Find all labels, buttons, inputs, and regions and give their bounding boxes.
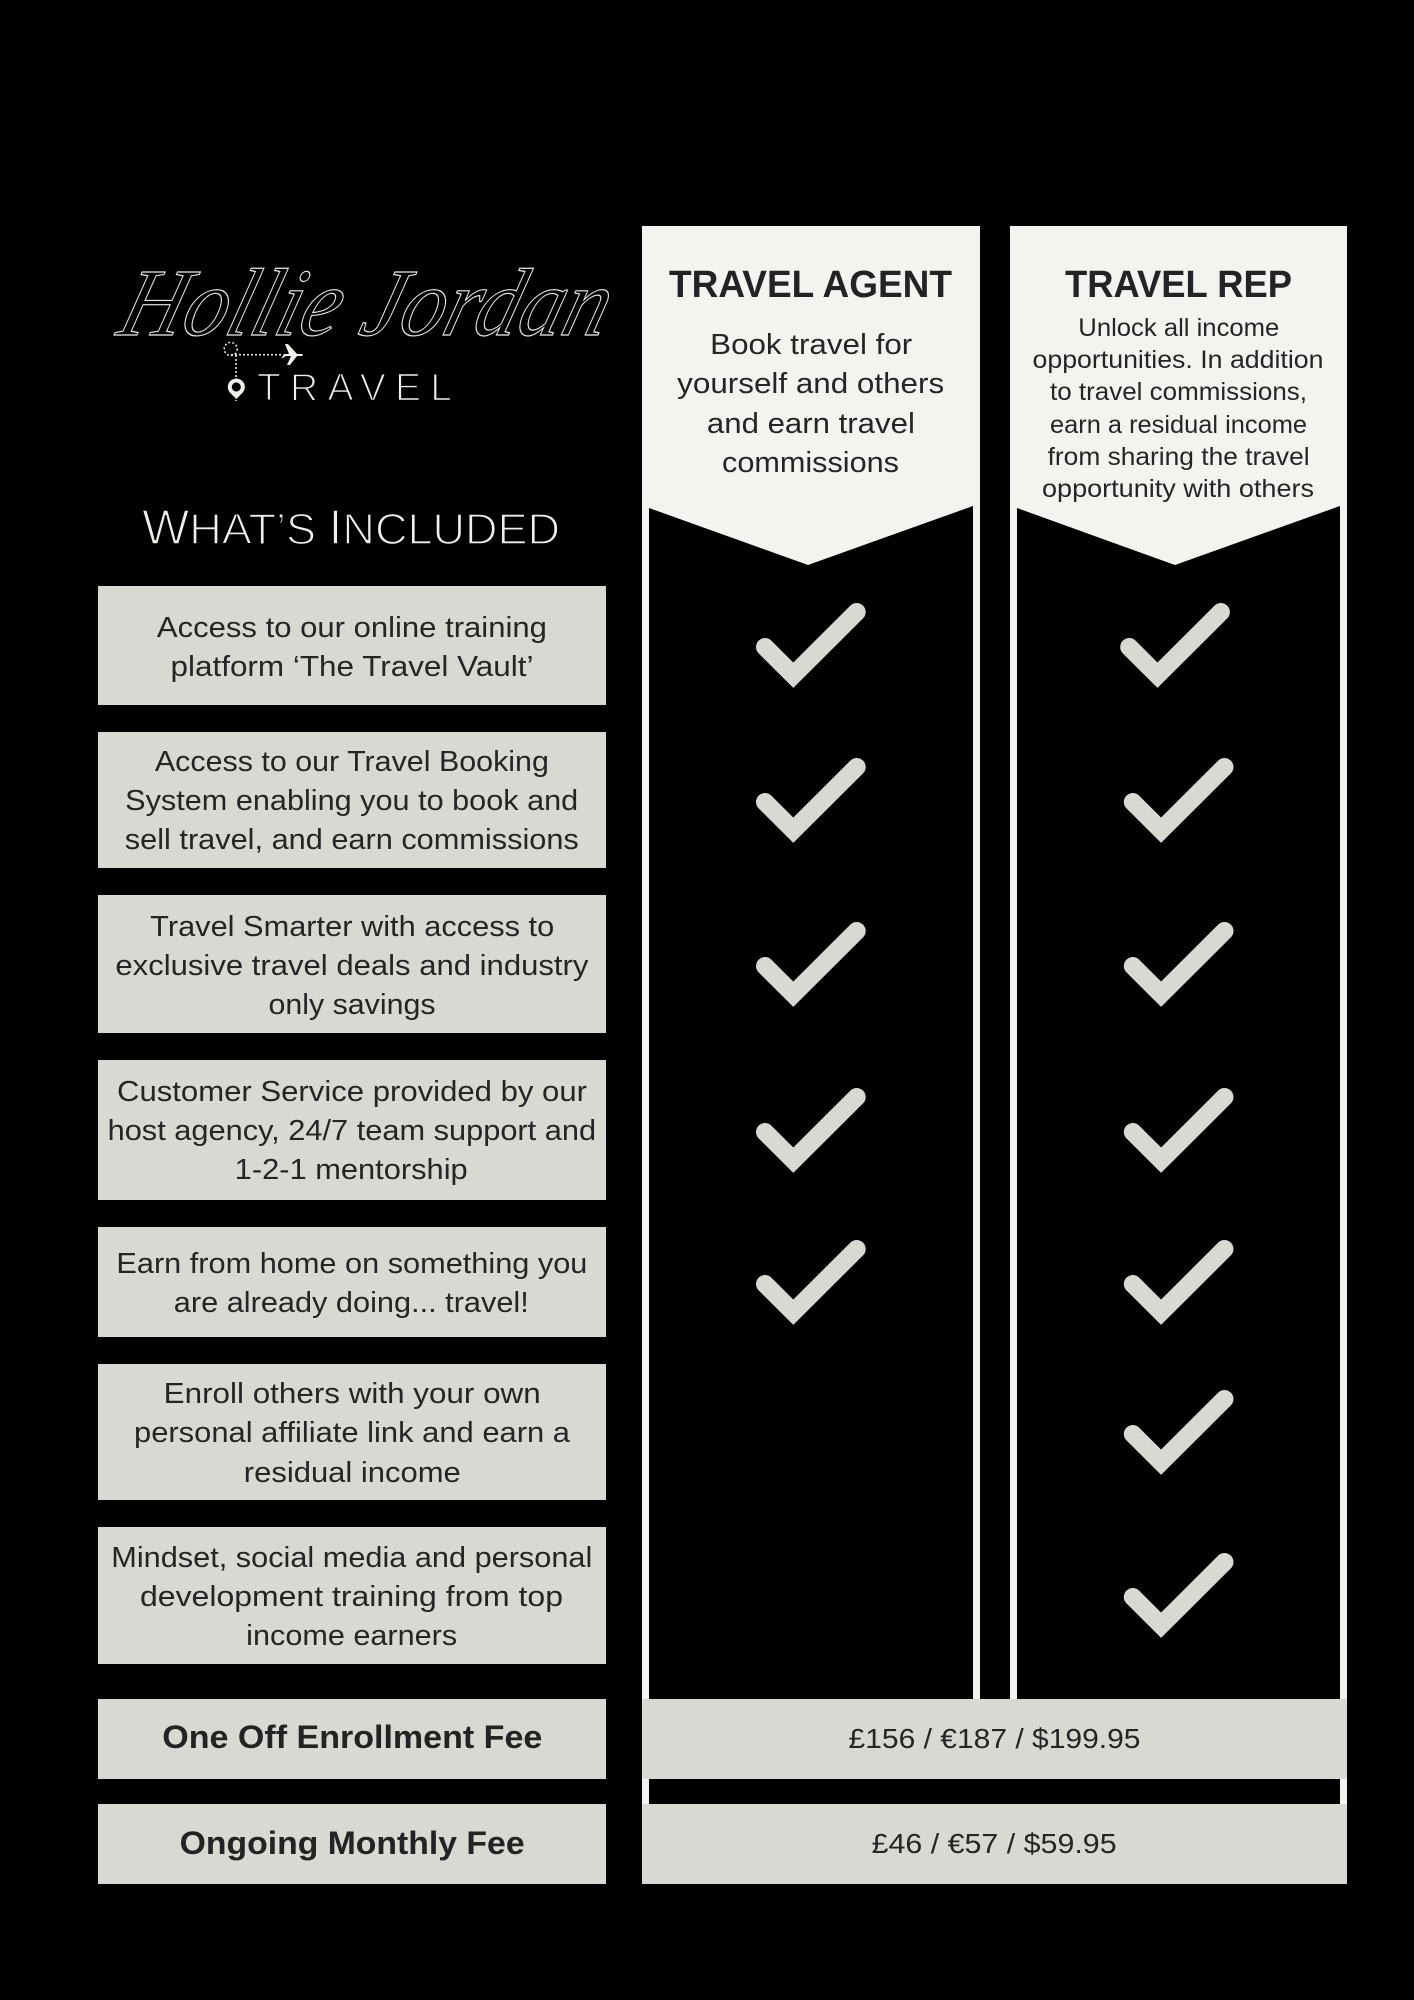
- feature row 2: [98, 732, 606, 868]
- feature row 4: 1-2-1 mentorship: [235, 1154, 468, 1186]
- feature row 3: only savings: [268, 989, 436, 1021]
- description: Travel Agent: Book travel for: [710, 329, 913, 361]
- feature row 1: platform ‘The Travel Vault’: [170, 651, 534, 683]
- feature row 3: Travel Smarter with access to: [150, 911, 554, 943]
- black gap between fee rows: [649, 1779, 1340, 1804]
- label: Ongoing Monthly Fee: Ongoing Monthly Fee: [180, 1825, 525, 1861]
- feature row 6: Enroll others with your own: [164, 1378, 541, 1410]
- feature row 7: development training from top: [140, 1581, 563, 1613]
- description: Travel Rep: earn a residual income: [1050, 411, 1307, 439]
- description: Travel Agent: and earn travel: [707, 408, 915, 440]
- panel: Travel Agent column: [642, 226, 980, 1804]
- label: One Off Enrollment Fee: [98, 1699, 606, 1779]
- feature row 5: Earn from home on something you: [116, 1248, 587, 1280]
- feature row 2: System enabling you to book and: [125, 785, 578, 817]
- description: Travel Rep: opportunities. In addition: [1032, 346, 1324, 374]
- price row: monthly fee: [642, 1804, 1347, 1884]
- label: Ongoing Monthly Fee: [98, 1804, 606, 1884]
- price row: enrollment fee: £156 / €187 / $199.95: [848, 1723, 1140, 1754]
- logo signature: Hollie Jordan: [108, 251, 626, 357]
- feature row 6: residual income: [244, 1457, 461, 1489]
- feature row 7: Mindset, social media and personal: [111, 1542, 592, 1574]
- feature row 3: exclusive travel deals and industry: [115, 950, 589, 982]
- icon: Travel Rep checkmarks: [1129, 612, 1224, 1625]
- feature row 5: [98, 1227, 606, 1337]
- description: Travel Agent: commissions: [722, 447, 899, 479]
- panel: Travel Rep column: [1010, 226, 1347, 1804]
- price row: monthly fee: £46 / €57 / $59.95: [872, 1828, 1117, 1859]
- logo: Hollie Jordan Travel: [108, 251, 626, 410]
- price row: enrollment fee: [642, 1699, 1347, 1779]
- description: Travel Agent: yourself and others: [677, 368, 944, 400]
- label: One Off Enrollment Fee: One Off Enrollment Fee: [162, 1719, 542, 1755]
- icon: Travel Agent checkmarks: [765, 612, 857, 1312]
- feature row 4: [98, 1060, 606, 1200]
- description: Travel Rep: opportunity with others: [1042, 475, 1314, 503]
- feature row 3: [98, 895, 606, 1033]
- icon: flight path with plane and pin: [224, 342, 303, 401]
- feature row 2: Access to our Travel Booking: [155, 746, 549, 778]
- feature row 2: sell travel, and earn commissions: [125, 824, 579, 856]
- feature row 6: personal affiliate link and earn a: [134, 1417, 571, 1449]
- logo word TRAVEL: TRAVEL: [257, 367, 452, 410]
- feature row 7: [98, 1527, 606, 1664]
- description: Travel Rep: from sharing the travel: [1048, 443, 1310, 471]
- description: Travel Rep: to travel commissions,: [1050, 378, 1307, 406]
- heading: Travel Rep: TRAVEL REP: [1065, 264, 1292, 306]
- feature row 5: are already doing... travel!: [174, 1287, 529, 1319]
- feature row 1: [98, 586, 606, 705]
- feature row 6: [98, 1364, 606, 1500]
- feature row 4: Customer Service provided by our: [117, 1076, 587, 1108]
- description: Travel Rep: Unlock all income: [1078, 314, 1279, 342]
- description: Travel Rep: [1032, 314, 1324, 503]
- feature row 1: Access to our online training: [157, 612, 547, 644]
- feature row 4: host agency, 24/7 team support and: [108, 1115, 596, 1147]
- description: Travel Agent: [677, 329, 944, 479]
- heading: What's Included: WHAT’S INCLUDED: [142, 501, 560, 555]
- heading: Travel Agent: TRAVEL AGENT: [669, 264, 952, 306]
- feature row 7: income earners: [246, 1620, 457, 1652]
